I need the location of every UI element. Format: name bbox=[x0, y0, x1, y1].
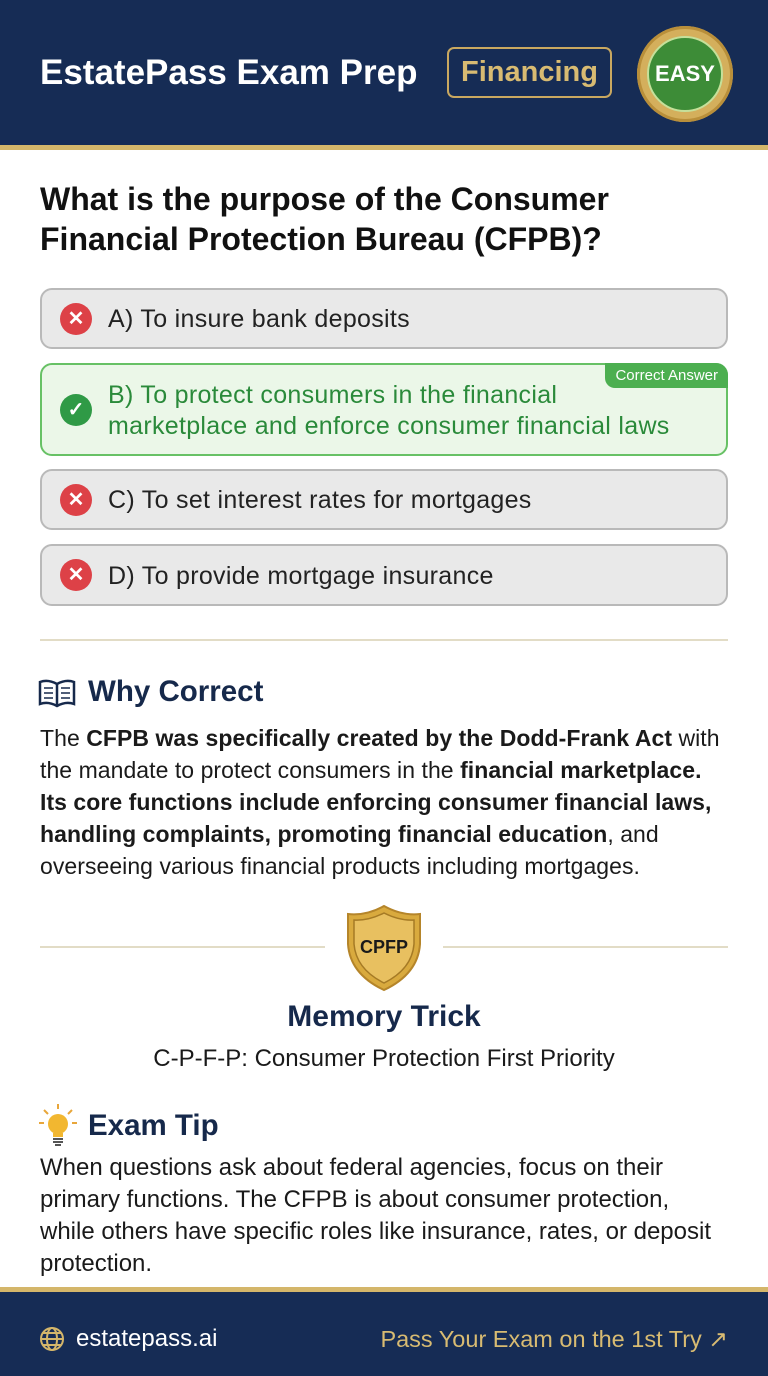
option B correct bbox=[40, 363, 728, 456]
footer url: estatepass.ai bbox=[76, 1325, 217, 1352]
heading: exam tip: Exam Tip bbox=[88, 1109, 219, 1142]
option C: C) To set interest rates for mortgages bbox=[108, 486, 532, 514]
title: EstatePass Exam Prep bbox=[40, 53, 417, 92]
question bbox=[40, 181, 609, 257]
tip text: protection. bbox=[40, 1250, 152, 1277]
option B correct: ✓ bbox=[68, 399, 84, 421]
explanation text: the mandate to protect consumers in the financial marketplace. bbox=[40, 757, 702, 783]
icon: globe bbox=[40, 1327, 64, 1351]
mnemonic: C-P-F-P: Consumer Protection First Priority bbox=[153, 1045, 615, 1072]
option A: A) To insure bank deposits bbox=[108, 305, 410, 333]
option C: ✕ bbox=[68, 489, 84, 511]
footer slogan: Pass Your Exam on the 1st Try ↗ bbox=[380, 1326, 728, 1352]
header bbox=[0, 0, 768, 150]
tip text: primary functions. The CFPB is about consumer protection, bbox=[40, 1186, 669, 1213]
heading: memory trick: Memory Trick bbox=[287, 1000, 481, 1033]
option B correct: marketplace and enforce consumer financial laws bbox=[108, 412, 670, 440]
icon: shield CPFP: CPFP bbox=[360, 937, 408, 957]
icon: lightbulb bbox=[39, 1104, 77, 1146]
question: Financial Protection Bureau (CFPB)? bbox=[40, 221, 602, 257]
icon: book bbox=[38, 680, 76, 708]
heading: why correct: Why Correct bbox=[88, 675, 263, 708]
footer bbox=[0, 1287, 768, 1376]
correct answer tag bbox=[605, 363, 728, 388]
option D: ✕ bbox=[68, 564, 84, 586]
category tag bbox=[447, 47, 612, 98]
explanation text: overseeing various financial products including mortgages. bbox=[40, 853, 640, 879]
option A bbox=[40, 288, 728, 349]
badge: easy: EASY bbox=[655, 61, 715, 86]
icon: shield CPFP bbox=[347, 904, 421, 992]
tip text: When questions ask about federal agencies, focus on their bbox=[40, 1154, 663, 1181]
explanation text: Its core functions include enforcing consumer financial laws, bbox=[40, 789, 711, 815]
tip text: while others have specific roles like insurance, rates, or deposit bbox=[40, 1218, 711, 1245]
question: What is the purpose of the Consumer bbox=[40, 181, 609, 217]
category tag: Financing bbox=[461, 56, 598, 88]
badge: easy bbox=[637, 26, 733, 122]
option D: D) To provide mortgage insurance bbox=[108, 562, 494, 590]
explanation text: handling complaints, promoting financial education, and bbox=[40, 821, 659, 847]
explanation text bbox=[40, 725, 720, 879]
correct answer tag: Correct Answer bbox=[615, 367, 718, 384]
option C bbox=[40, 469, 728, 530]
option A: ✕ bbox=[68, 308, 84, 330]
explanation text: The CFPB was specifically created by the Dodd-Frank Act with bbox=[40, 725, 720, 751]
option B correct: B) To protect consumers in the financial bbox=[108, 381, 557, 409]
tip text bbox=[40, 1154, 711, 1277]
option D bbox=[40, 544, 728, 606]
